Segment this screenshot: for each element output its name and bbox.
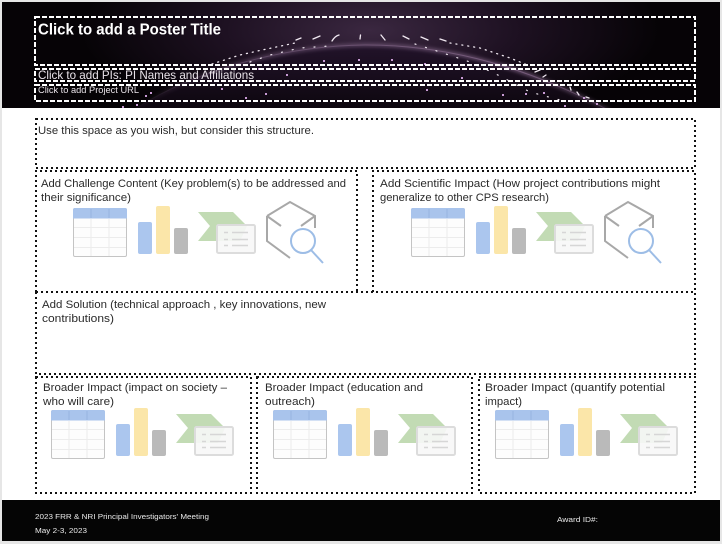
challenge text: Add Challenge Content (Key problem(s) to be addressed and [41,178,346,190]
white content area [2,108,720,500]
icons: table, bars, card [273,408,455,458]
panel: broader impact education [257,377,472,493]
footer meeting text: May 2-3, 2023 [35,526,87,535]
panel: scientific impact [373,171,695,292]
broader impact education text: Broader Impact (education and [265,382,423,394]
broader impact potential text: impact) [485,396,522,408]
footer award ID: Award ID#: [557,515,598,524]
sparkle arc [212,35,589,100]
footer meeting text: 2023 FRR & NRI Principal Investigators' Meeting [35,512,209,521]
panel: solution [36,292,695,374]
PI names text: Click to add PIs: PI Names and Affiliations [38,68,254,82]
project URL placeholder box [35,85,695,101]
PI names placeholder box [35,68,695,82]
challenge text: their significance) [41,192,131,204]
broader impact potential text: Broader Impact (quantify potential [485,382,665,394]
title placeholder box [35,17,695,65]
broader impact education text: outreach) [265,396,315,408]
poster title: Click to add a Poster Title [38,22,221,38]
solution text: Add Solution (technical approach , key innovations, new [42,299,327,311]
intro text: Use this space as you wish, but consider this structure. [38,125,314,137]
broader impact society text: Broader Impact (impact on society – [43,382,228,394]
panel: broader impact society [36,377,251,493]
project URL text: Click to add Project URL [38,85,139,95]
broader impact society text: who will care) [42,396,114,408]
icons: table, bars, card [51,408,233,458]
icons: table, bars, card, cube [73,202,323,263]
scientific impact text: Add Scientific Impact (How project contributions might [380,178,661,190]
panel: broader impact potential [479,377,695,493]
scientific impact text: generalize to other CPS research) [380,192,549,204]
header band [2,2,720,112]
panel: challenge [36,171,357,292]
panel: intro structure [36,119,695,168]
icons: table, bars, card [495,408,677,458]
footer band [2,500,720,541]
solution text: contributions) [42,313,114,325]
icons: table, bars, card, cube [411,202,661,263]
